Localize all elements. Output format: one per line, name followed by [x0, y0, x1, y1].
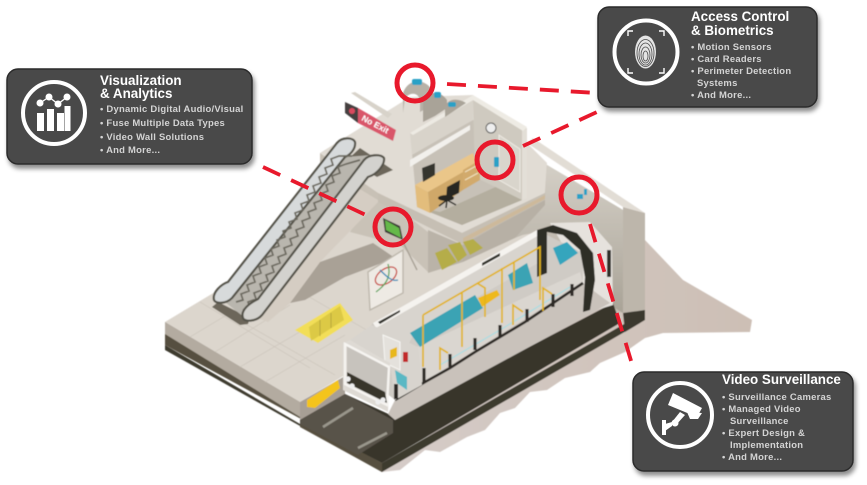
- list: video surveillance items: • Surveillance Cameras: [722, 392, 832, 403]
- no exit overhead rail: [351, 92, 392, 118]
- room right wall: [473, 100, 522, 200]
- list: visualization items: • And More...: [100, 145, 160, 156]
- rear floor under mezzanine: [350, 190, 428, 272]
- tunnel wall cap: [527, 138, 645, 213]
- heading: visualization: Visualization: [100, 73, 182, 88]
- tan strip: [463, 195, 545, 243]
- office chair: [438, 180, 460, 208]
- train upper wall: [376, 235, 540, 345]
- mezzanine slab edge: [378, 193, 545, 244]
- escalator pad bottom: [212, 302, 250, 325]
- escalator steps: [236, 156, 360, 310]
- train body shell: [550, 222, 613, 312]
- list: video surveillance items: • Managed Video: [722, 404, 801, 415]
- tunnel back wall: [515, 165, 623, 313]
- yellow floor patch: [478, 290, 500, 307]
- list: video surveillance items: • And More...: [722, 452, 782, 463]
- track bed: [300, 303, 620, 463]
- heading: access control: & Biometrics: [691, 23, 774, 38]
- list: access control items: • Card Readers: [691, 54, 762, 65]
- train floor: [395, 272, 583, 400]
- icon: security camera: [648, 383, 712, 447]
- room back interior: [412, 120, 522, 225]
- blue bench far: [410, 295, 483, 347]
- tunnel wall end: [623, 207, 645, 313]
- yellow bench: [295, 303, 353, 343]
- train interior back wall: [345, 230, 583, 400]
- train cab front: [343, 340, 390, 412]
- waiting seats under mezzanine: [435, 239, 483, 270]
- list: video surveillance items: • Expert Design &: [722, 428, 805, 439]
- blue sill stripe: [440, 287, 570, 365]
- glass strip: [410, 125, 470, 167]
- yellow platform edge block: [307, 380, 340, 408]
- monitor: [422, 163, 435, 182]
- upper pad at escalator top: [347, 148, 393, 177]
- wall foot: [623, 310, 645, 332]
- platform side wall: [165, 322, 382, 472]
- upper floor left edge: [320, 153, 378, 200]
- end window: [607, 250, 611, 277]
- escalator right balustrade: [242, 155, 384, 321]
- mezzanine column: [428, 230, 463, 273]
- train near lower body: [388, 283, 610, 420]
- panel: access control and biometrics: [598, 7, 817, 107]
- escalator left balustrade: [214, 138, 355, 303]
- stair support: [258, 180, 385, 322]
- blue bench end: [553, 242, 578, 265]
- track bed left: [300, 394, 393, 455]
- ground floor platform: [165, 190, 540, 402]
- back wall behind train: [400, 165, 623, 370]
- red callout connector lines: [263, 84, 632, 364]
- station isometric illustration: [165, 79, 752, 472]
- cab window: [347, 345, 388, 395]
- list: visualization items: • Fuse Multiple Data Types: [100, 118, 225, 129]
- red highlight circles: [375, 65, 597, 245]
- platform side wall upper: [165, 322, 300, 417]
- black arch: [537, 225, 595, 312]
- dark window strips: [378, 253, 500, 324]
- reception desk: [415, 153, 480, 213]
- fire extinguisher: [403, 352, 408, 362]
- headlights: [345, 376, 386, 405]
- floor shadow under stairs: [290, 243, 395, 303]
- panel: video surveillance: [633, 372, 853, 471]
- mezzanine slab top: [320, 95, 547, 233]
- icon: analytics chart: [23, 82, 85, 144]
- cab post: [394, 384, 398, 399]
- display screen: [383, 218, 403, 240]
- heading: access control: Access Control: [691, 9, 789, 24]
- room wall end column: [522, 128, 527, 200]
- cab frame: [345, 344, 389, 405]
- room floor shadow: [417, 185, 522, 225]
- rails: [323, 408, 387, 448]
- floor tile lines: [190, 280, 370, 382]
- list: access control items: • And More...: [691, 90, 751, 101]
- list: visualization items: • Dynamic Digital Audio/Visual: [100, 104, 243, 115]
- heading: visualization: & Analytics: [100, 86, 172, 101]
- tunnel camera: [577, 189, 587, 199]
- entry gates: [403, 79, 466, 122]
- escalator steps band: [225, 155, 372, 318]
- door: [499, 135, 520, 192]
- train near sill: [395, 283, 583, 400]
- no exit sign: [345, 102, 396, 141]
- train cab side: [350, 325, 422, 400]
- heading: video surveillance: Video Surveillance: [722, 372, 841, 387]
- no exit sign: No Exit: [360, 113, 391, 136]
- cast shadow: [382, 240, 752, 472]
- display support pole: [402, 240, 417, 270]
- cab door: [383, 335, 400, 370]
- train: [343, 222, 613, 420]
- blue bench middle: [508, 263, 533, 290]
- panel: visualization and analytics: [7, 69, 252, 164]
- cab seat: [395, 370, 407, 390]
- base slab: [165, 315, 640, 472]
- list: access control items: Systems: [697, 78, 738, 89]
- wall clock: [486, 123, 496, 133]
- cab dark lower panel: [347, 372, 387, 403]
- room wall top right: [473, 95, 527, 131]
- list: access control items: • Motion Sensors: [691, 42, 772, 53]
- biometric reader: [494, 157, 499, 167]
- list: visualization items: • Video Wall Solutions: [100, 132, 204, 143]
- mezzanine underside: [463, 198, 545, 262]
- icon: fingerprint: [614, 20, 678, 84]
- black door posts: [424, 284, 572, 383]
- yellow rails: [423, 247, 552, 370]
- roof band: [373, 230, 541, 328]
- platform front wall: [300, 376, 345, 421]
- list: video surveillance items: Surveillance: [730, 416, 789, 427]
- room left wall: [410, 95, 473, 155]
- route map board: [368, 250, 403, 310]
- list: access control items: • Perimeter Detection: [691, 66, 791, 77]
- yellow notice: [390, 347, 397, 359]
- room left wall top: [410, 95, 475, 135]
- escalator: [214, 138, 384, 321]
- list: video surveillance items: Implementation: [730, 440, 803, 451]
